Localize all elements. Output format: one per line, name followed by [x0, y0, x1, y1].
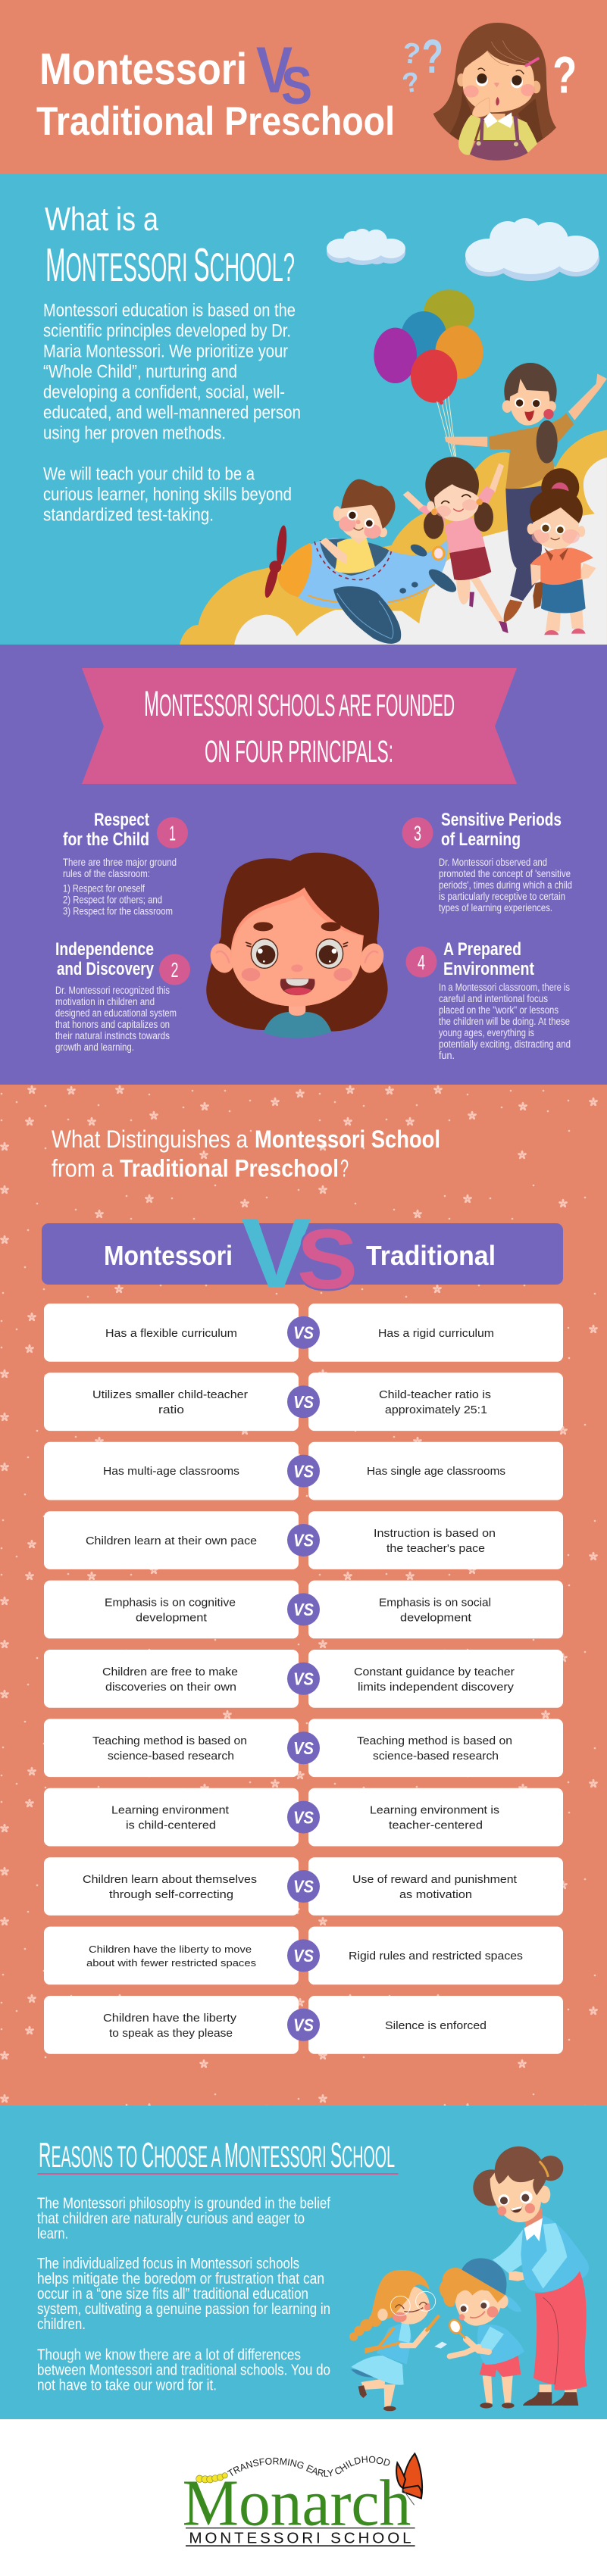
header bar: Montessori VS Traditional: V: [241, 1197, 311, 1308]
row 5: Emphasis is on social: [379, 1597, 491, 1609]
principle 4: A Prepared Environment: the children will be doing. At these: [439, 1016, 570, 1027]
principle 4: A Prepared Environment: young ages, everything is: [439, 1027, 534, 1038]
principle 4: A Prepared Environment: careful and intentional focus: [439, 993, 548, 1004]
icon: small cloud: [327, 229, 405, 265]
text block: reasons paragraphs: that children are naturally curious and eager to: [37, 2210, 305, 2227]
text block: reasons paragraphs: between Montessori and traditional schools. You do: [37, 2362, 330, 2378]
butterfly: [396, 2453, 422, 2505]
text block: reasons paragraphs: children.: [37, 2316, 86, 2333]
row 5: Emphasis is on cognitive: [105, 1597, 236, 1609]
text block: reasons paragraphs: system, cultivating a genuine passion for learning in: [37, 2301, 330, 2318]
row 7: Teaching method is based on: [357, 1735, 512, 1747]
heading: What Distinguishes a Montessori School from a Traditional Preschool?: Montessori School: [255, 1126, 440, 1153]
principle 2: Independence and Discovery: [55, 939, 190, 1053]
row 10: Children have the liberty to move: [89, 1944, 252, 1955]
illustration: smiling child face: [206, 853, 388, 1038]
cloud ground: [234, 457, 607, 645]
principle 1: Respect for the Child: There are three major ground: [63, 857, 177, 868]
balloons: [374, 289, 483, 457]
row 1: Has a flexible curriculum: [105, 1328, 237, 1340]
row 11: [44, 1996, 563, 2054]
illustration: teacher with two children and magnifying glass: [349, 2147, 589, 2411]
row 11: Silence is enforced: [385, 2020, 487, 2032]
row 8: [44, 1788, 563, 1847]
row 8: Learning environment is: [370, 1804, 499, 1816]
row 1: Has a rigid curriculum: [378, 1328, 494, 1340]
row 7: science-based research: [373, 1750, 499, 1763]
row 7: science-based research: [108, 1750, 234, 1763]
logo: Monarch Montessori School: MONTESSORI SCHOOL: [189, 2529, 411, 2546]
title: Montessori vs Traditional Preschool: [36, 34, 395, 144]
logo: Monarch Montessori School: Monarch: [183, 2466, 411, 2539]
header bar: Montessori VS Traditional: [42, 1197, 563, 1308]
text block: intro paragraph: developing a confident, social, well-: [43, 382, 285, 403]
text block: intro paragraph: standardized test-taking.: [43, 504, 214, 526]
section: what is a Montessori school: [0, 174, 607, 645]
row 3: [44, 1442, 563, 1500]
row 4: the teacher's pace: [386, 1543, 485, 1555]
text block: intro paragraph: educated, and well-mannered person: [43, 403, 301, 423]
text block: intro paragraph: using her proven methods.: [43, 423, 226, 443]
principle 2: Independence and Discovery: Independence: [55, 939, 154, 960]
teacher: [473, 2147, 589, 2406]
illustration: thinking girl with question marks: ?: [400, 66, 422, 99]
row 9: VS: [293, 1877, 314, 1897]
girl with phone: [349, 2270, 447, 2411]
principle 4: A Prepared Environment: fun.: [439, 1050, 455, 1061]
row 3: Has multi-age classrooms: [103, 1466, 239, 1478]
principle 4: A Prepared Environment: 4: [418, 951, 425, 974]
row 9: Use of reward and punishment: [352, 1874, 517, 1886]
row 3: VS: [293, 1461, 314, 1481]
row 10: VS: [293, 1946, 314, 1966]
heading: What is a Montessori School?: [45, 201, 295, 292]
row 11: to speak as they please: [109, 2028, 233, 2040]
header bar: Montessori VS Traditional: S: [297, 1212, 358, 1307]
row 11: VS: [293, 2015, 314, 2034]
heading: What is a Montessori School?: What is a: [45, 201, 158, 238]
text block: reasons paragraphs: The Montessori philosophy is grounded in the belief: [37, 2195, 330, 2212]
section: four principles: [0, 645, 607, 1085]
heading: What Distinguishes a Montessori School from a Traditional Preschool?: from a: [52, 1154, 114, 1182]
row 1: VS: [293, 1322, 314, 1342]
principle 1: Respect for the Child: 1) Respect for oneself: [63, 883, 145, 895]
row 2: [44, 1372, 563, 1431]
heading: What is a Montessori School?: MONTESSORI SCHOOL?: [45, 239, 295, 292]
section: footer logo: [183, 2453, 423, 2546]
principle 2: Independence and Discovery: that honors and capitalizes on: [55, 1019, 170, 1030]
text block: intro paragraph: Maria Montessori. We prioritize your: [43, 341, 288, 362]
banner: Montessori schools are founded on four principals: [82, 668, 517, 784]
illustration: thinking girl with question marks: ?: [552, 47, 577, 105]
principle 3: Sensitive Periods of Learning: [402, 810, 572, 913]
teacher: [445, 363, 607, 623]
heading: What Distinguishes a Montessori School from a Traditional Preschool?: ?: [340, 1154, 349, 1182]
middle girl: [403, 457, 508, 633]
heading: What Distinguishes a Montessori School from a Traditional Preschool?: What Distinguishes a: [52, 1126, 248, 1153]
principle 1: Respect for the Child: Respect: [94, 810, 149, 830]
heading: Reasons to Choose a Montessori School: REASONS TO CHOOSE A MONTESSORI SCHOOL: [39, 2135, 395, 2175]
banner: Montessori schools are founded on four principals: ON FOUR PRINCIPALS:: [205, 734, 393, 769]
row 2: ratio: [158, 1404, 184, 1416]
title: Montessori vs Traditional Preschool: Montessori: [39, 45, 247, 94]
principle 2: Independence and Discovery: designed an educational system: [55, 1007, 177, 1019]
principle 3: Sensitive Periods of Learning: Sensitive Periods: [441, 810, 562, 830]
row 2: approximately 25:1: [385, 1404, 487, 1416]
caterpillar: [196, 2473, 227, 2483]
row 6: Children are free to make: [102, 1666, 238, 1678]
row 2: VS: [293, 1392, 314, 1412]
row 7: VS: [293, 1738, 314, 1758]
principle 1: Respect for the Child: for the Child: [63, 829, 149, 850]
row 8: is child-centered: [126, 1819, 216, 1831]
principle 4: A Prepared Environment: placed on the "work" or lessons: [439, 1004, 559, 1016]
text block: reasons paragraphs: The individualized focus in Montessori schools: [37, 2256, 299, 2272]
row 4: [44, 1511, 563, 1569]
row 4: Instruction is based on: [374, 1528, 496, 1540]
principle 4: A Prepared Environment: potentially exciting, distracting and: [439, 1038, 571, 1050]
row 8: teacher-centered: [389, 1819, 483, 1831]
row 9: [44, 1857, 563, 1916]
principle 2: Independence and Discovery: growth and learning.: [55, 1041, 134, 1053]
principle 4: A Prepared Environment: Environment: [443, 959, 534, 979]
text block: intro paragraph: We will teach your child to be a: [43, 464, 255, 485]
principle 1: Respect for the Child: [63, 810, 188, 917]
row 5: VS: [293, 1600, 314, 1619]
principle 1: Respect for the Child: 3) Respect for the classroom: [63, 906, 173, 917]
illustration: thinking girl with question marks: [400, 23, 577, 161]
principle 1: Respect for the Child: 2) Respect for others; and: [63, 895, 162, 906]
principle 2: Independence and Discovery: motivation in children and: [55, 996, 155, 1007]
row 6: [44, 1650, 563, 1708]
text block: reasons paragraphs: helps mitigate the boredom or frustration that can: [37, 2271, 324, 2287]
heading: What Distinguishes a Montessori School from a Traditional Preschool?: [52, 1126, 440, 1182]
text block: intro paragraph: scientific principles developed by Dr.: [43, 321, 291, 342]
section: header: [0, 0, 607, 174]
text block: reasons paragraphs: occur in a “one size fits all” traditional education: [37, 2286, 308, 2303]
principle 2: Independence and Discovery: their natural instincts towards: [55, 1030, 170, 1041]
title: Montessori vs Traditional Preschool: V: [256, 34, 293, 107]
text block: intro paragraph: Montessori education is based on the: [43, 301, 296, 321]
principle 3: Sensitive Periods of Learning: of Learning: [441, 829, 521, 850]
row 9: through self-correcting: [109, 1889, 233, 1901]
row 9: as motivation: [399, 1889, 472, 1901]
principle 4: A Prepared Environment: A Prepared: [443, 939, 521, 960]
boy with magnifying glass: [440, 2258, 524, 2409]
row 9: Children learn about themselves: [83, 1874, 257, 1886]
principle 3: Sensitive Periods of Learning: is particularly receptive to certain: [439, 891, 565, 902]
text block: reasons paragraphs: not have to take our word for it.: [37, 2377, 217, 2393]
principle 4: A Prepared Environment: In a Montessori classroom, there is: [439, 982, 570, 993]
heading: What Distinguishes a Montessori School from a Traditional Preschool?: Traditional Preschool: [120, 1154, 339, 1182]
principle 3: Sensitive Periods of Learning: 3: [414, 821, 421, 845]
row 6: VS: [293, 1669, 314, 1689]
principle 3: Sensitive Periods of Learning: periods', times during which a child: [439, 879, 572, 891]
illustration: teacher and children with balloons and airplane: [180, 289, 607, 645]
row 6: discoveries on their own: [105, 1681, 236, 1694]
row 8: VS: [293, 1807, 314, 1827]
illustration: thinking girl with question marks: ?: [422, 30, 443, 83]
text block: intro paragraph: curious learner, honing skills beyond: [43, 485, 292, 504]
title: Montessori vs Traditional Preschool: S: [281, 56, 312, 115]
section: comparison: [0, 1085, 607, 2106]
illustration: thinking girl with question marks: ?: [401, 36, 422, 71]
tagline: TRANSFORMING EARLY CHILDHOOD: [227, 2456, 390, 2477]
principle 2: Independence and Discovery: 2: [171, 958, 179, 982]
principle 2: Independence and Discovery: Dr. Montessori recognized this: [55, 985, 170, 996]
row 10: [44, 1927, 563, 1984]
row 4: VS: [293, 1531, 314, 1550]
header bar: Montessori VS Traditional: Montessori: [104, 1240, 233, 1271]
boy in airplane: [262, 479, 460, 644]
text block: intro paragraph: [43, 301, 301, 526]
row 7: Teaching method is based on: [92, 1735, 247, 1747]
header bar: Montessori VS Traditional: Traditional: [366, 1240, 496, 1271]
principle 1: Respect for the Child: rules of the classroom:: [63, 868, 150, 879]
title: Montessori vs Traditional Preschool: Traditional Preschool: [36, 99, 395, 144]
section: reasons to choose: [0, 2106, 607, 2419]
row 3: Has single age classrooms: [367, 1466, 505, 1478]
row 8: Learning environment: [111, 1804, 229, 1816]
principle 1: Respect for the Child: 1: [169, 821, 176, 845]
row 1: [44, 1304, 563, 1362]
row 5: [44, 1581, 563, 1638]
row 2: Child-teacher ratio is: [379, 1389, 491, 1401]
row 4: Children learn at their own pace: [86, 1535, 257, 1547]
text block: reasons paragraphs: Though we know there are a lot of differences: [37, 2347, 301, 2363]
principle 4: A Prepared Environment: [406, 939, 571, 1061]
row 2: Utilizes smaller child-teacher: [92, 1389, 248, 1401]
row 5: development: [136, 1612, 207, 1624]
principle 3: Sensitive Periods of Learning: Dr. Montessori observed and: [439, 857, 547, 868]
principle 2: Independence and Discovery: and Discovery: [57, 959, 155, 979]
yellow hills: [180, 430, 607, 645]
row 10: Rigid rules and restricted spaces: [349, 1950, 523, 1962]
principle 3: Sensitive Periods of Learning: types of learning experiences.: [439, 902, 552, 913]
row 10: about with fewer restricted spaces: [86, 1957, 257, 1969]
text block: intro paragraph: “Whole Child”, nurturing and: [43, 362, 237, 382]
text block: reasons paragraphs: learn.: [37, 2225, 68, 2242]
principle 3: Sensitive Periods of Learning: promoted the concept of 'sensitive: [439, 868, 571, 879]
text block: reasons paragraphs: [37, 2195, 330, 2393]
icon: large cloud: [465, 218, 599, 281]
row 6: Constant guidance by teacher: [354, 1666, 515, 1678]
row 5: development: [400, 1612, 471, 1624]
row 7: [44, 1719, 563, 1777]
row 6: limits independent discovery: [358, 1681, 515, 1694]
row 11: Children have the liberty: [103, 2012, 237, 2025]
front girl: [527, 468, 596, 635]
